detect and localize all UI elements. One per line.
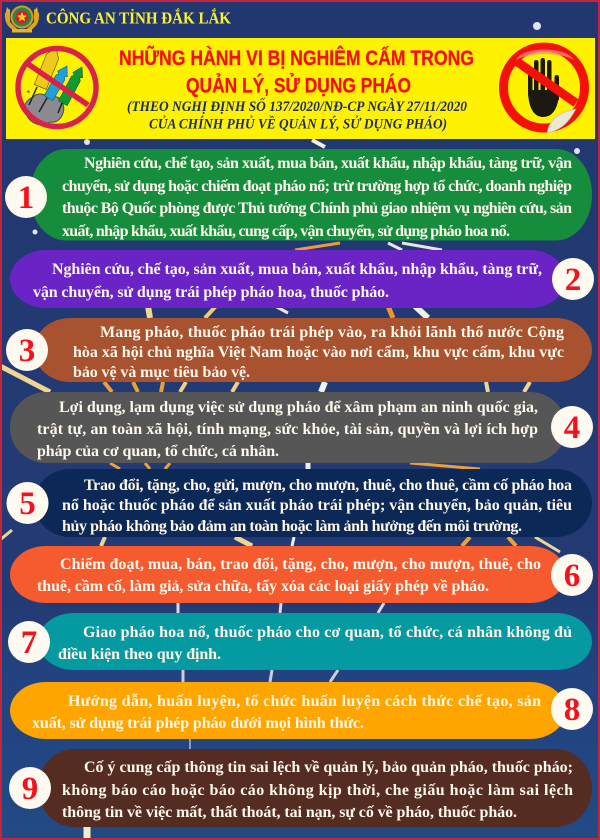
icon: police emblem — [5, 6, 39, 32]
item 6: Chiếm đoạt, mua, bán, trao đổi, tặng, cho, mượn, cho mượn, thuê, cho — [60, 556, 541, 573]
item 1: 1 — [18, 180, 34, 216]
item 5: hủy pháo không bảo đảm an toàn hoặc làm ảnh hưởng đến môi trường. — [62, 518, 522, 535]
item 7: Giao pháo hoa nổ, thuốc pháo cho cơ quan, tổ chức, cá nhân không đủ — [83, 624, 572, 641]
item 4: Lợi dụng, lạm dụng việc sử dụng pháo để xâm phạm an ninh quốc gia, — [59, 399, 538, 416]
item 3: Mang pháo, thuốc pháo trái phép vào, ra khỏi lãnh thổ nước Cộng — [100, 324, 564, 341]
item 8: Hướng dẫn, huấn luyện, tổ chức huấn luyện cách thức chế tạo, sản — [68, 693, 541, 710]
item 2: vận chuyển, sử dụng trái phép pháo hoa, thuốc pháo. — [33, 284, 389, 301]
banner subtitle — [127, 97, 467, 132]
item 3: hòa xã hội chủ nghĩa Việt Nam hoặc vào nơi cấm, khu vực cấm, khu vực — [73, 344, 564, 361]
item 6: thuê, cầm cố, làm giả, sửa chữa, tẩy xóa các loại giấy phép về pháo. — [37, 578, 489, 595]
banner heading — [119, 46, 474, 98]
item 7: điều kiện theo quy định. — [58, 646, 221, 663]
item 7 — [8, 613, 592, 670]
item 1: xuất, nhập khẩu, xuất khẩu, cung cấp, vận chuyển, sử dụng pháo hoa nổ. — [62, 223, 510, 240]
item 1: thuộc Bộ Quốc phòng được Thủ tướng Chính phủ giao nhiệm vụ nghiên cứu, sản — [62, 200, 572, 217]
icon: stop hand — [504, 47, 584, 133]
item 6: 6 — [564, 558, 580, 594]
header: organisation name: CÔNG AN TỈNH ĐẮK LẮK — [46, 8, 232, 28]
item 2 — [10, 250, 594, 308]
item 4: trật tự, an toàn xã hội, tính mạng, sức khỏe, tài sản, quyền và lợi ích hợp — [37, 421, 538, 438]
item 8: 8 — [564, 692, 580, 728]
item 8: xuất, sử dụng trái phép pháo dưới mọi hình thức. — [32, 715, 364, 732]
icon: no fireworks — [18, 46, 96, 126]
item 9 — [9, 749, 592, 827]
item 1: chuyển, sử dụng hoặc chiếm đoạt pháo nổ; trừ trường hợp tổ chức, doanh nghiệp — [62, 178, 572, 195]
item 4 — [10, 392, 593, 463]
item 9: Cố ý cung cấp thông tin sai lệch về quản lý, bảo quản pháo, thuốc pháo; — [84, 759, 573, 776]
item 3: 3 — [19, 333, 35, 369]
item 9: không báo cáo hoặc báo cáo không kịp thời, che giấu hoặc làm sai lệch — [62, 782, 573, 799]
item 7: 7 — [21, 625, 37, 661]
item 5: nổ hoặc thuốc pháo để sản xuất pháo trái phép; vận chuyển, bảo quản, tiêu — [62, 497, 572, 514]
item 9: 9 — [22, 771, 38, 807]
item 4: pháp của cơ quan, tổ chức, cá nhân. — [37, 443, 279, 460]
item 3 — [6, 318, 592, 382]
item 4: 4 — [564, 410, 580, 446]
item 9: thông tin về việc mất, thất thoát, tai nạn, sự cố về pháo, thuốc pháo. — [62, 804, 517, 821]
item 6 — [10, 546, 593, 603]
item 1: Nghiên cứu, chế tạo, sản xuất, mua bán, xuất khẩu, nhập khẩu, tàng trữ, vận — [84, 155, 572, 172]
banner subtitle: CỦA CHÍNH PHỦ VỀ QUẢN LÝ, SỬ DỤNG PHÁO) — [149, 116, 447, 132]
banner heading: QUẢN LÝ, SỬ DỤNG PHÁO — [186, 74, 411, 98]
item 3: bảo vệ và mục tiêu bảo vệ. — [73, 364, 250, 381]
item 5 — [6, 469, 592, 537]
banner subtitle: (THEO NGHỊ ĐỊNH SỐ 137/2020/NĐ-CP NGÀY 27/11/2020 — [127, 97, 467, 115]
item 2: 2 — [565, 262, 581, 298]
item 1 — [5, 149, 592, 240]
title banner — [6, 38, 595, 139]
banner heading: NHỮNG HÀNH VI BỊ NGHIÊM CẤM TRONG — [119, 46, 474, 70]
item 5: Trao đổi, tặng, cho, gửi, mượn, cho mượn, thuê, cho thuê, cầm cố pháo hoa — [84, 477, 572, 494]
item 2: Nghiên cứu, chế tạo, sản xuất, mua bán, xuất khẩu, nhập khẩu, tàng trữ, — [52, 261, 542, 278]
item 8 — [10, 682, 593, 739]
item 5: 5 — [19, 486, 36, 522]
